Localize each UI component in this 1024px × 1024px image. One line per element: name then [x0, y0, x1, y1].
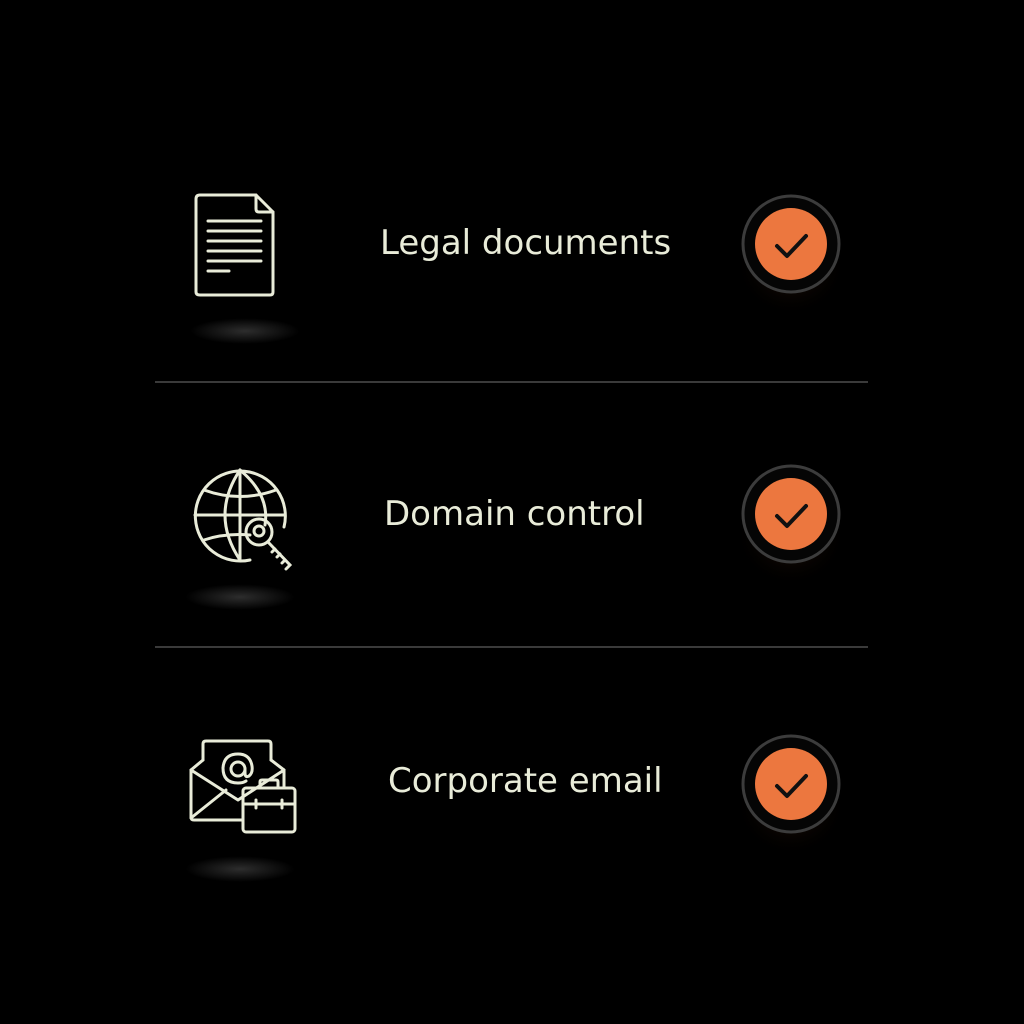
- icon: globe with key: [194, 468, 292, 571]
- row 1: legal documents: [194, 194, 290, 342]
- row 2: domain control: [194, 468, 292, 608]
- row 3: corporate email: [189, 740, 296, 880]
- check badge 2: [742, 464, 840, 565]
- check badge 3: [742, 734, 840, 835]
- icon: document: [194, 194, 274, 296]
- label: Legal documents: Legal documents: [380, 223, 671, 263]
- check badge 1: [742, 194, 840, 295]
- label: Corporate email: Corporate email: [388, 761, 663, 801]
- icon: envelope with briefcase: [189, 740, 296, 834]
- label: Domain control: Domain control: [384, 494, 645, 534]
